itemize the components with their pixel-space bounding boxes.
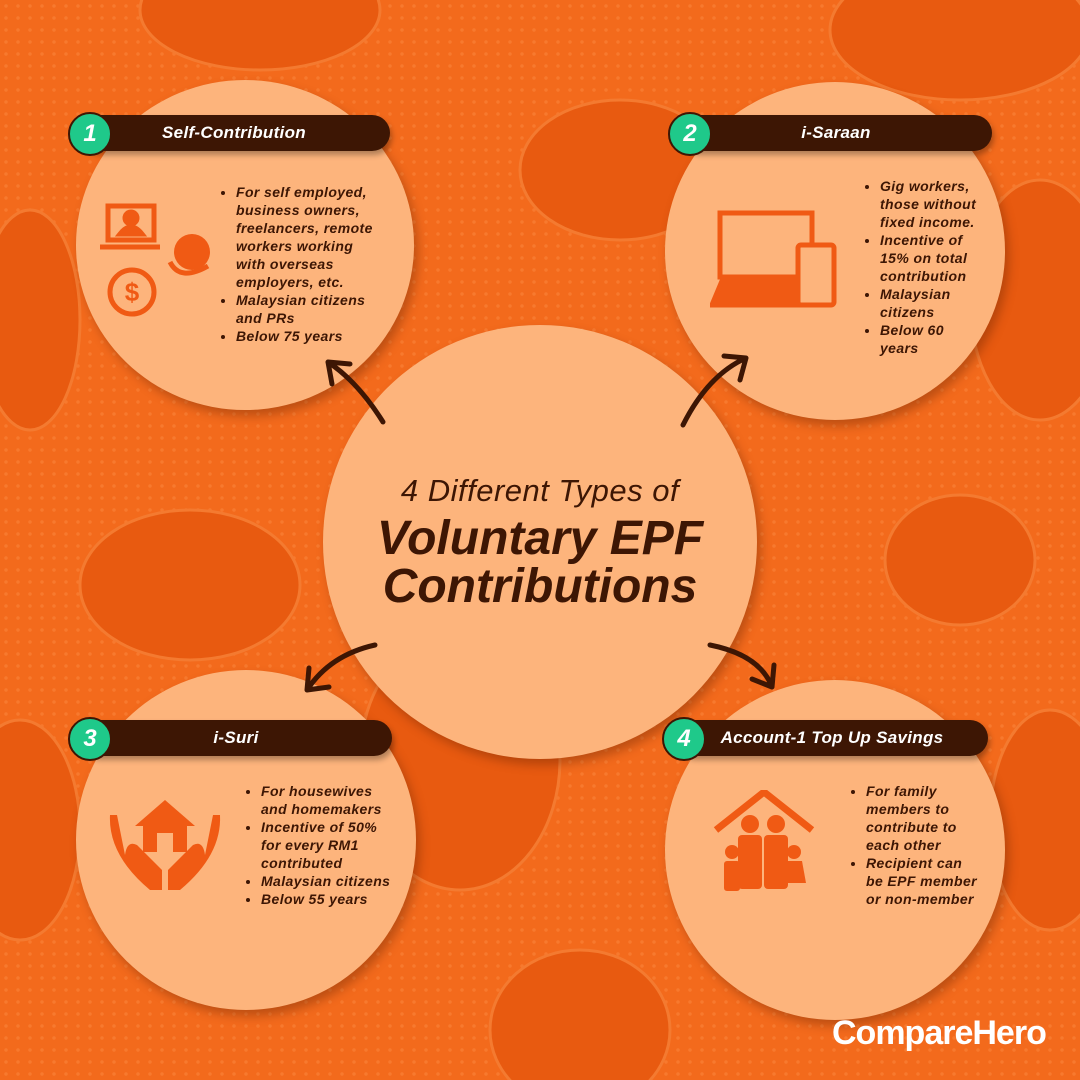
text 4: Recipient can	[866, 855, 962, 871]
center circle	[323, 325, 757, 759]
icon: self-contribution: $	[125, 277, 140, 307]
text 2: those without	[880, 196, 976, 212]
text 2: Incentive of	[880, 232, 963, 248]
number 2	[668, 112, 712, 156]
text 4	[851, 783, 978, 907]
text 3: For housewives	[261, 783, 372, 799]
text 1: Malaysian citizens	[236, 292, 365, 308]
text 1: freelancers, remote	[236, 220, 373, 236]
text 3: Below 55 years	[261, 891, 368, 907]
center title: Voluntary EPF	[377, 512, 703, 565]
text 3: for every RM1	[261, 837, 359, 853]
center title: 4 Different Types of	[401, 473, 679, 508]
text 4: members to	[866, 801, 949, 817]
text 1: employers, etc.	[236, 274, 344, 290]
text 1: For self employed,	[236, 184, 367, 200]
text 2: fixed income.	[880, 214, 975, 230]
icon: self-contribution	[100, 204, 210, 316]
number 4: 4	[677, 725, 691, 752]
center title	[377, 473, 704, 613]
circle 1	[76, 80, 414, 410]
number 1	[68, 112, 112, 156]
number 4	[662, 717, 706, 761]
text 3: contributed	[261, 855, 342, 871]
logo: CompareHero	[832, 1014, 1046, 1052]
pill 3	[80, 720, 392, 756]
text 2: years	[880, 340, 919, 356]
text 1: and PRs	[236, 310, 295, 326]
circle 4	[665, 680, 1005, 1020]
icon: hands house	[110, 800, 220, 890]
text 2: contribution	[880, 268, 966, 284]
text 4: each other	[866, 837, 941, 853]
text 2: citizens	[880, 304, 935, 320]
text 1: business owners,	[236, 202, 360, 218]
number 3	[68, 717, 112, 761]
text 3: and homemakers	[261, 801, 382, 817]
pill 1: Self-Contribution	[162, 123, 306, 142]
text 4: or non-member	[866, 891, 974, 907]
icon: family	[714, 790, 814, 891]
text 3: Incentive of 50%	[261, 819, 377, 835]
text 2	[865, 178, 976, 356]
text 1: with overseas	[236, 256, 334, 272]
circle 2	[665, 82, 1005, 420]
text 1	[221, 184, 373, 344]
text 2: 15% on total	[880, 250, 967, 266]
text 3	[246, 783, 390, 907]
text 4: For family	[866, 783, 937, 799]
number 2: 2	[683, 120, 697, 147]
number 3: 3	[83, 725, 97, 752]
text 1: workers working	[236, 238, 353, 254]
icon: laptop	[710, 210, 836, 308]
text 4: be EPF member	[866, 873, 977, 889]
pill 4: Account-1 Top Up Savings	[721, 728, 943, 747]
pill 4	[676, 720, 988, 756]
pill 1	[78, 115, 390, 151]
pill 2	[680, 115, 992, 151]
number 1: 1	[83, 120, 97, 147]
pill 3: i-Suri	[213, 728, 259, 747]
pill 2: i-Saraan	[801, 123, 871, 142]
text 2: Below 60	[880, 322, 944, 338]
text 4: contribute to	[866, 819, 957, 835]
center title: Contributions	[383, 560, 697, 613]
circle 3	[76, 670, 416, 1010]
text 3: Malaysian citizens	[261, 873, 390, 889]
text 1: Below 75 years	[236, 328, 343, 344]
text 2: Gig workers,	[880, 178, 970, 194]
text 2: Malaysian	[880, 286, 951, 302]
